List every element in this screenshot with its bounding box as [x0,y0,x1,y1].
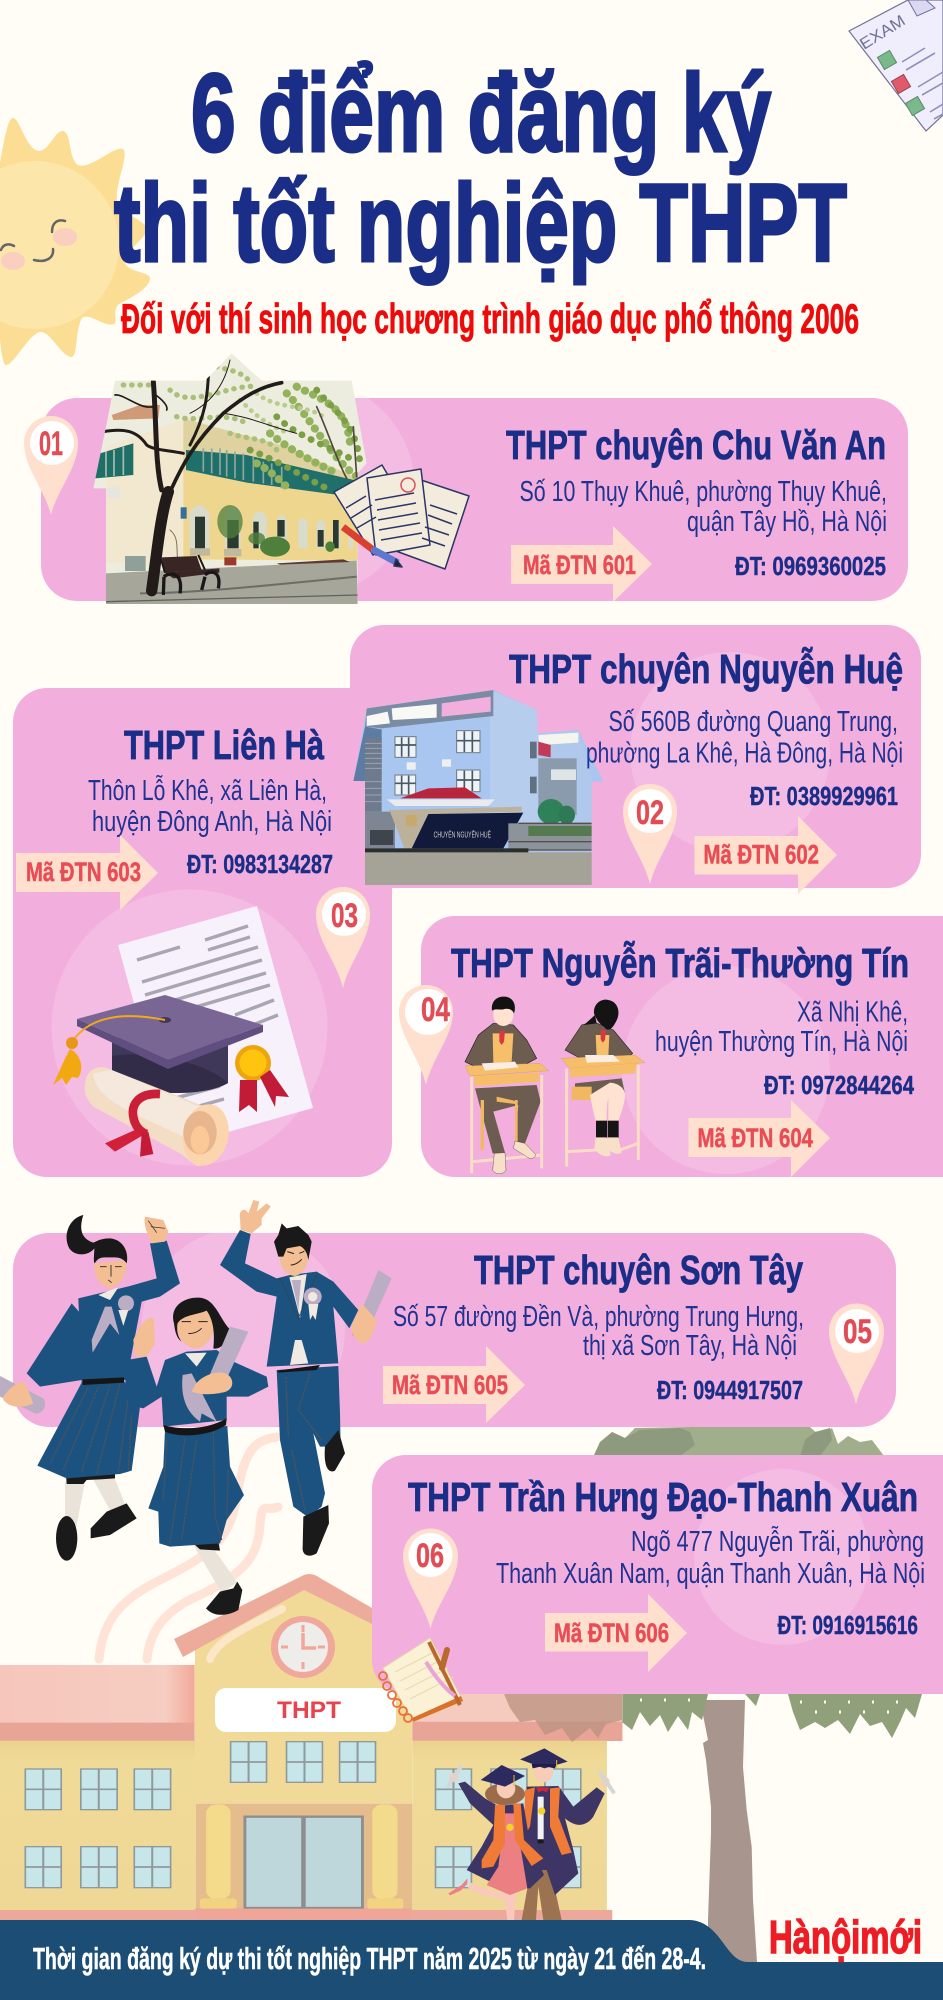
illustration: jumping students [0,1200,392,1615]
address [586,706,903,770]
address: huyện Đông Anh, Hà Nội [92,806,332,838]
panel 3: THPT Liên Hà [13,688,392,1177]
pin 04: 04 [421,991,450,1029]
arrow: code 605: Mã ĐTN 605 [392,1370,508,1400]
arrow: code 604: Mã ĐTN 604 [698,1123,813,1153]
arrow: code 605 [383,1346,525,1423]
title [114,52,847,285]
decorative swirl ribbons [99,1437,278,1659]
arrow: code 604 [688,1100,830,1177]
panel 2: THPT chuyên Nguyễn Huệ [350,625,921,894]
address [655,996,908,1058]
tower with gable roof [174,1574,412,1803]
school name: THPT Liên Hà [124,722,324,768]
panel 4: THPT Nguyễn Trãi-Thường Tín [399,916,943,1177]
arrow: code 601: Mã ĐTN 601 [523,550,636,580]
student: boy with jacket [220,1200,392,1556]
arrow: code 603: Mã ĐTN 603 [26,857,141,887]
photo: Nguyễn Huệ school: CHUYÊN NGUYỄN HUỆ [434,830,491,839]
photo: Nguyễn Huệ school [352,687,608,887]
pin 05 [829,1303,884,1404]
girl at desk [561,1000,645,1167]
pin 05: 05 [843,1313,872,1351]
pin 01 [24,416,78,515]
pin 02 [623,784,677,884]
leaves over the roof [504,1694,622,1742]
boy at desk [465,997,549,1174]
illustration: graduating couple [447,1748,614,1920]
address: Thôn Lỗ Khê, xã Liên Hà, [88,775,327,807]
arrow: code 603 [16,835,158,910]
school name: THPT chuyên Sơn Tây [474,1247,803,1293]
pin 06 [403,1528,458,1628]
arrow: code 606 [545,1594,687,1672]
tree behind panels [594,1427,922,1962]
clock [271,1616,335,1678]
arrow: code 606: Mã ĐTN 606 [554,1618,669,1648]
student: girl with tube [125,1298,268,1615]
icon: exam paper: EXAM [857,12,909,53]
photo: Chu Văn An school [90,350,380,610]
graduate: woman [447,1765,544,1920]
address: Số 57 đường Đền Và, phường Trung Hưng, [393,1301,804,1333]
pin 02: 02 [636,794,664,832]
pin 03: 03 [331,897,358,935]
icon: exam papers and pen [334,465,469,569]
icon: smiling sun [0,118,150,365]
tower windows [231,1742,376,1782]
arrow: code 602: Mã ĐTN 602 [704,840,819,870]
arrow: code 601 [511,526,652,602]
phone: ĐT: 0969360025 [735,553,886,581]
graduate: man [520,1748,614,1920]
left wing and right wing [0,1665,622,1921]
address: thị xã Sơn Tây, Hà Nội [583,1330,797,1362]
address [393,1301,804,1362]
pin 04 [399,985,453,1085]
panel 1: THPT chuyên Chu Văn An [24,350,908,610]
address [88,775,332,838]
arrow: code 602 [694,816,837,894]
icon: notebook and pen [379,1638,463,1722]
school building [0,1574,622,1921]
phone: ĐT: 0944917507 [657,1377,803,1405]
phone: ĐT: 0389929961 [750,783,898,811]
address [520,476,887,538]
panel 6: THPT Trần Hưng Đạo-Thanh Xuân [372,1455,943,1694]
footer banner [0,1920,943,2000]
illustration: two students at desks [465,997,645,1174]
pin 06: 06 [416,1537,444,1575]
icon: graduation cap, diploma and scroll [53,906,313,1170]
icon: exam paper [849,0,943,131]
pin 01: 01 [39,425,63,463]
pin 03 [316,887,370,988]
address [496,1526,925,1590]
panel 5: THPT chuyên Sơn Tây [13,1228,896,1432]
THPT sign [215,1688,396,1732]
THPT sign: THPT [277,1697,341,1724]
phone: ĐT: 0983134287 [187,851,333,879]
student: girl with ponytail [0,1215,180,1561]
